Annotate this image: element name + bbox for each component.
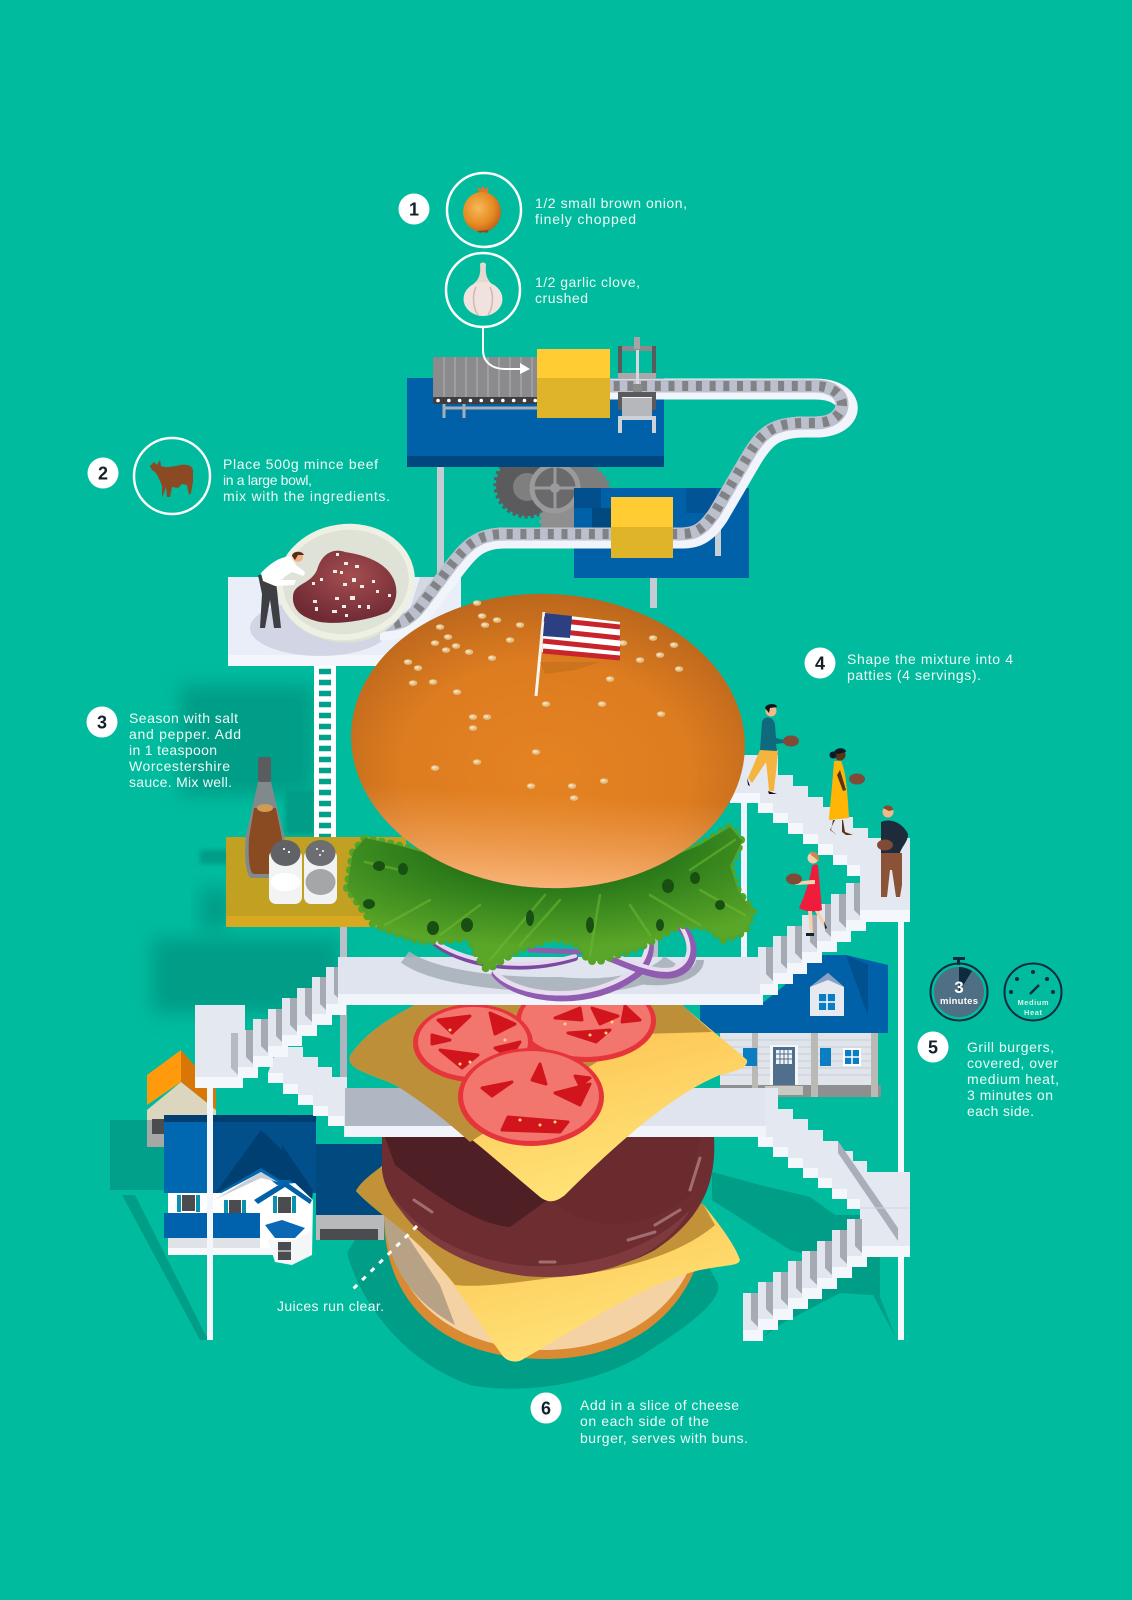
step 6 badge: 6 bbox=[541, 1398, 551, 1418]
person mixing bbox=[258, 552, 305, 628]
bottom bun bbox=[384, 1216, 705, 1359]
tomato front bbox=[458, 1048, 604, 1146]
conveyor intake bbox=[433, 357, 537, 418]
house: left large bbox=[164, 1115, 385, 1265]
step 6 badge bbox=[530, 1392, 562, 1424]
step 3 text bbox=[129, 710, 241, 790]
step 2 text bbox=[223, 456, 390, 504]
step 5 text: medium heat, bbox=[967, 1071, 1059, 1087]
bowl of mince bbox=[270, 515, 422, 649]
white stairs: top right bbox=[730, 755, 910, 922]
step 3 text: in 1 teaspoon bbox=[129, 742, 217, 758]
step 6 text: Add in a slice of cheese bbox=[580, 1397, 739, 1413]
icon: heat gauge: Heat bbox=[1024, 1008, 1042, 1017]
step 5 text: covered, over bbox=[967, 1055, 1058, 1071]
step 3 badge bbox=[86, 706, 118, 738]
pepper shaker bbox=[304, 840, 337, 904]
person: teal shirt bbox=[747, 704, 799, 794]
icon: heat gauge: Medium bbox=[1018, 998, 1049, 1007]
left pole bbox=[207, 1088, 213, 1340]
salt shaker bbox=[269, 840, 302, 904]
step 4 text: Shape the mixture into 4 bbox=[847, 651, 1013, 667]
tomato left bbox=[413, 1004, 533, 1082]
step 1 text: onion: 1/2 small brown onion, bbox=[535, 195, 687, 211]
white stairs: middle right bbox=[758, 883, 866, 995]
lower cheese slice bbox=[356, 1166, 740, 1362]
flag bbox=[536, 612, 620, 696]
step 3 text: Worcestershire bbox=[129, 758, 230, 774]
house: right blue roof bbox=[700, 955, 888, 1097]
step 1 badge: 1 bbox=[409, 200, 419, 220]
middle walkway bbox=[338, 957, 763, 1005]
step 4 text bbox=[847, 651, 1013, 683]
conveyor belt bbox=[380, 386, 847, 630]
callout: juices run clear: Juices run clear. bbox=[277, 1298, 384, 1314]
white platform with bowl bbox=[228, 577, 461, 666]
arrow: garlic to machine bbox=[483, 327, 530, 374]
top cheese slice bbox=[349, 1005, 747, 1201]
press machine bbox=[618, 337, 656, 433]
beef patty bbox=[382, 1137, 714, 1277]
white stairs: upper left bbox=[195, 967, 346, 1088]
step 4 badge bbox=[804, 648, 836, 678]
step 3 badge: 3 bbox=[97, 712, 107, 732]
icon: timer bbox=[930, 957, 988, 1020]
onion rings bbox=[432, 924, 692, 998]
step 2 badge bbox=[88, 458, 118, 488]
step 2 text: Place 500g mince beef bbox=[223, 456, 378, 472]
support poles bbox=[340, 467, 904, 1340]
person: red dress bbox=[786, 852, 827, 936]
step 5 text: each side. bbox=[967, 1103, 1034, 1119]
step 1 text: garlic bbox=[535, 274, 640, 306]
white stairs: lower right bbox=[743, 1088, 910, 1341]
icon: heat gauge bbox=[1004, 964, 1062, 1020]
step 1 text: onion: finely chopped bbox=[535, 211, 636, 227]
step 2 badge: 2 bbox=[98, 464, 108, 484]
machine platform: upper blue bbox=[407, 378, 664, 467]
background shadows bbox=[110, 685, 896, 1389]
step 5 badge: 5 bbox=[928, 1038, 938, 1058]
step 6 text: on each side of the bbox=[580, 1413, 709, 1429]
white stairs: lower left bbox=[268, 1047, 347, 1137]
person: dark sweater bbox=[877, 806, 908, 897]
step 4 text: patties (4 servings). bbox=[847, 667, 981, 683]
step 5 text bbox=[967, 1039, 1059, 1119]
step 6 text bbox=[580, 1397, 748, 1446]
machine platform: lower blue bbox=[574, 488, 749, 578]
step 5 text: Grill burgers, bbox=[967, 1039, 1054, 1055]
top bun bbox=[344, 584, 752, 898]
bottle bbox=[245, 757, 285, 878]
icon: onion bbox=[447, 173, 521, 247]
step 1 text: onion bbox=[535, 195, 687, 227]
tomato right bbox=[516, 1005, 656, 1062]
yellow box: upper bbox=[537, 349, 610, 418]
icon: garlic bbox=[446, 253, 520, 327]
step 1 text: garlic: 1/2 garlic clove, bbox=[535, 274, 640, 290]
tomato slices bbox=[413, 1005, 656, 1146]
step 1 text: garlic: crushed bbox=[535, 290, 588, 306]
step 6 text: burger, serves with buns. bbox=[580, 1430, 748, 1446]
step 3 text: sauce. Mix well. bbox=[129, 774, 232, 790]
step 3 text: and pepper. Add bbox=[129, 726, 241, 742]
step 3 text: Season with salt bbox=[129, 710, 238, 726]
icon: timer: minutes bbox=[940, 996, 978, 1007]
step 5 badge bbox=[918, 1032, 948, 1062]
icon: timer: 3 bbox=[954, 978, 964, 997]
step 4 badge: 4 bbox=[815, 654, 825, 674]
step 1 badge bbox=[398, 194, 430, 224]
callout: juices run clear bbox=[277, 1226, 417, 1314]
yellow platform bbox=[226, 837, 406, 927]
lower walkway bbox=[345, 1088, 766, 1137]
person: yellow dress bbox=[829, 748, 865, 835]
step 5 text: 3 minutes on bbox=[967, 1087, 1053, 1103]
ladder bbox=[314, 666, 336, 847]
yellow box: lower bbox=[611, 497, 673, 558]
icon: cow bbox=[134, 438, 210, 514]
step 2 text: in a large bowl, bbox=[223, 472, 312, 488]
gears bbox=[496, 454, 610, 542]
house: orange bbox=[147, 1050, 216, 1147]
lettuce bbox=[347, 827, 753, 970]
step 2 text: mix with the ingredients. bbox=[223, 488, 390, 504]
